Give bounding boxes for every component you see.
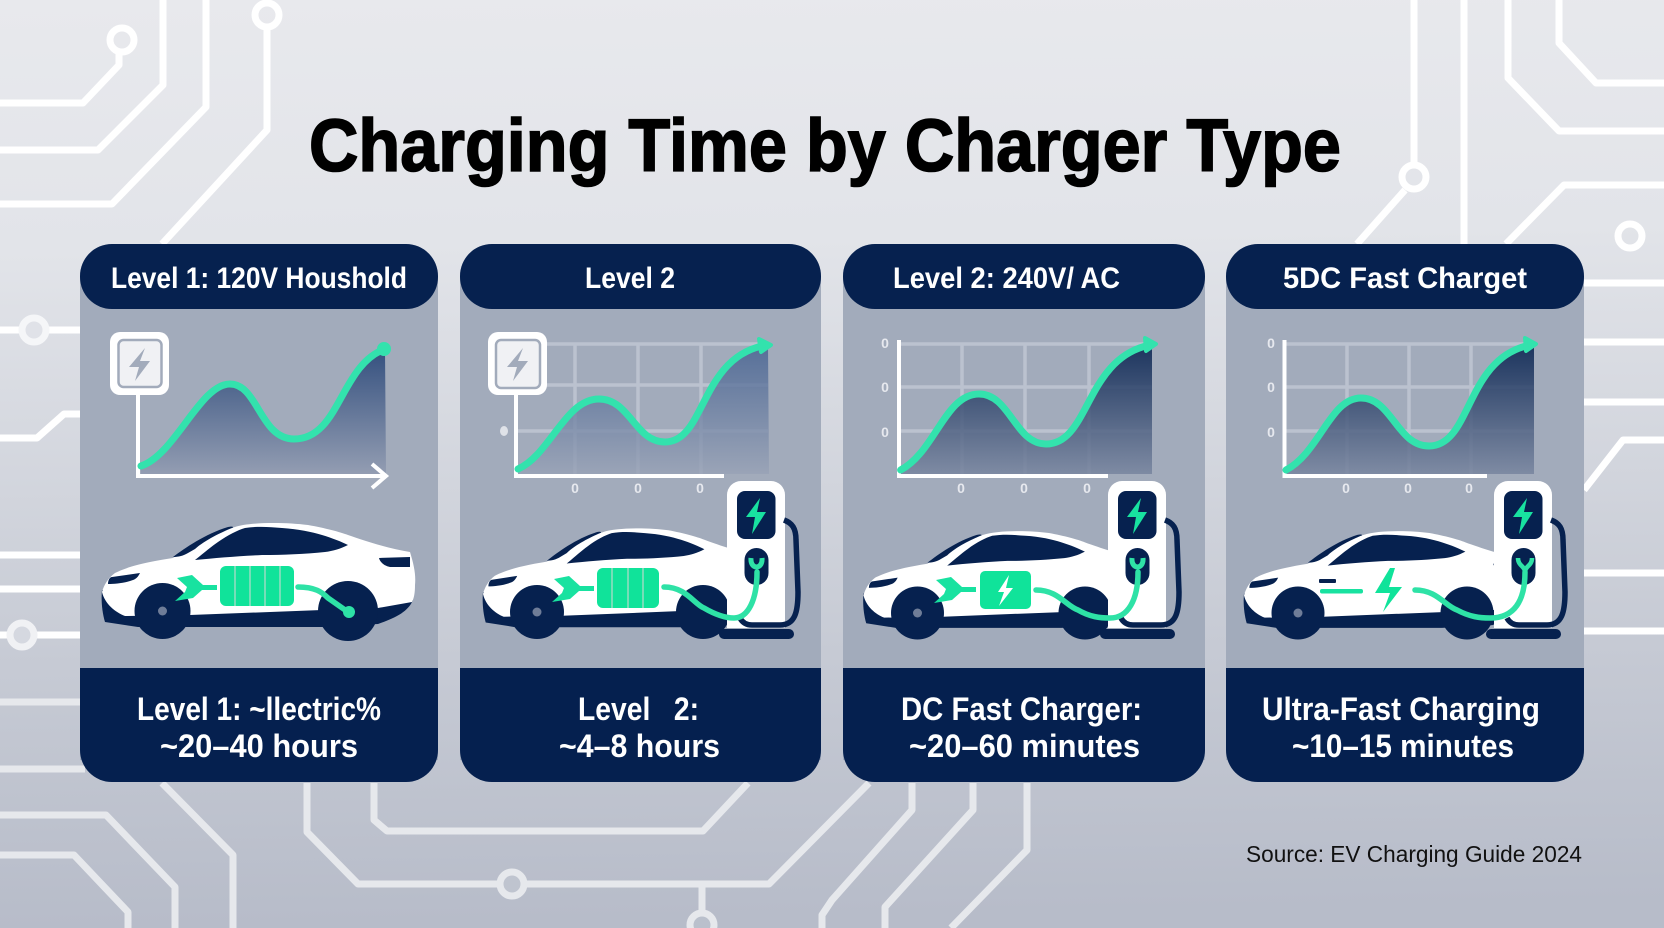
chart: DC fast curve: 0 xyxy=(1404,480,1412,496)
header pill: Level 2 240V: Level 2: 240V/ AC xyxy=(893,262,1120,295)
chart: DC fast curve xyxy=(1267,335,1536,496)
footer: Level 2 240V time: DC Fast Charger: xyxy=(901,691,1142,727)
footer: Level 2 time xyxy=(460,668,821,782)
footer: Level 1 time: ~20–40 hours xyxy=(160,728,358,764)
car with fast charge bolt xyxy=(1244,531,1526,640)
footer: ultra-fast time: ~10–15 minutes xyxy=(1292,728,1514,764)
chart: Level 2 curve: 0 xyxy=(696,480,704,496)
chart: Level 2 curve: 0 xyxy=(634,480,642,496)
chart: Level 2 240V curve: 0 xyxy=(1083,480,1091,496)
footer: Level 2 time: ~4–8 hours xyxy=(559,728,720,764)
panel: Level 1 card xyxy=(80,244,438,782)
chart: DC fast curve: 0 xyxy=(1267,379,1275,395)
source note: Source: EV Charging Guide 2024 xyxy=(1246,841,1582,867)
chart: DC fast curve: 0 xyxy=(1342,480,1350,496)
footer: ultra-fast time xyxy=(1226,668,1584,782)
charging station xyxy=(1036,481,1179,639)
icon: charger bolt badge xyxy=(488,332,547,395)
chart: Level 2 240V curve: 0 xyxy=(881,424,889,440)
footer: Level 2 time: Level 2: xyxy=(578,691,699,727)
charging station xyxy=(1415,481,1565,639)
chart: Level 2 curve xyxy=(500,339,771,496)
footer: Level 2 240V time xyxy=(843,668,1205,782)
footer: Level 1 time: Level 1: ~llectric% xyxy=(137,691,381,727)
header pill: Level 1 xyxy=(80,244,438,309)
chart: Level 2 240V curve: 0 xyxy=(1020,480,1028,496)
header pill: Level 1: Level 1: 120V Houshold xyxy=(111,262,407,295)
header pill: Level 2 xyxy=(460,244,821,309)
car with charge block xyxy=(863,531,1145,640)
panel: DC fast charger card xyxy=(1226,244,1584,782)
chart: DC fast curve: 0 xyxy=(1465,480,1473,496)
header pill: DC fast: 5DC Fast Charget xyxy=(1283,262,1527,295)
header pill: Level 2: Level 2 xyxy=(585,262,675,295)
chart: Level 2 240V curve: 0 xyxy=(957,480,965,496)
charging station xyxy=(664,481,798,639)
footer: Level 1 time xyxy=(80,668,438,782)
header pill: DC fast xyxy=(1226,244,1584,309)
chart: Level 2 240V curve: 0 xyxy=(881,335,889,351)
chart: DC fast curve: 0 xyxy=(1267,424,1275,440)
chart: DC fast curve: 0 xyxy=(1267,335,1275,351)
header pill: Level 2 240V xyxy=(843,244,1205,309)
icon: charger bolt badge xyxy=(110,332,169,395)
chart: Level 2 240V curve xyxy=(881,335,1156,496)
car with battery xyxy=(483,528,765,639)
chart: Level 2 curve: 0 xyxy=(571,480,579,496)
chart: Level 1 curve xyxy=(138,342,391,488)
panel: Level 2 240V card xyxy=(843,244,1205,782)
title: Charging Time by Charger Type xyxy=(309,104,1341,187)
panel: Level 2 card xyxy=(460,244,821,782)
footer: ultra-fast time: Ultra-Fast Charging xyxy=(1262,691,1540,727)
footer: Level 2 240V time: ~20–60 minutes xyxy=(909,728,1140,764)
chart: Level 2 240V curve: 0 xyxy=(881,379,889,395)
car with battery xyxy=(102,523,415,641)
